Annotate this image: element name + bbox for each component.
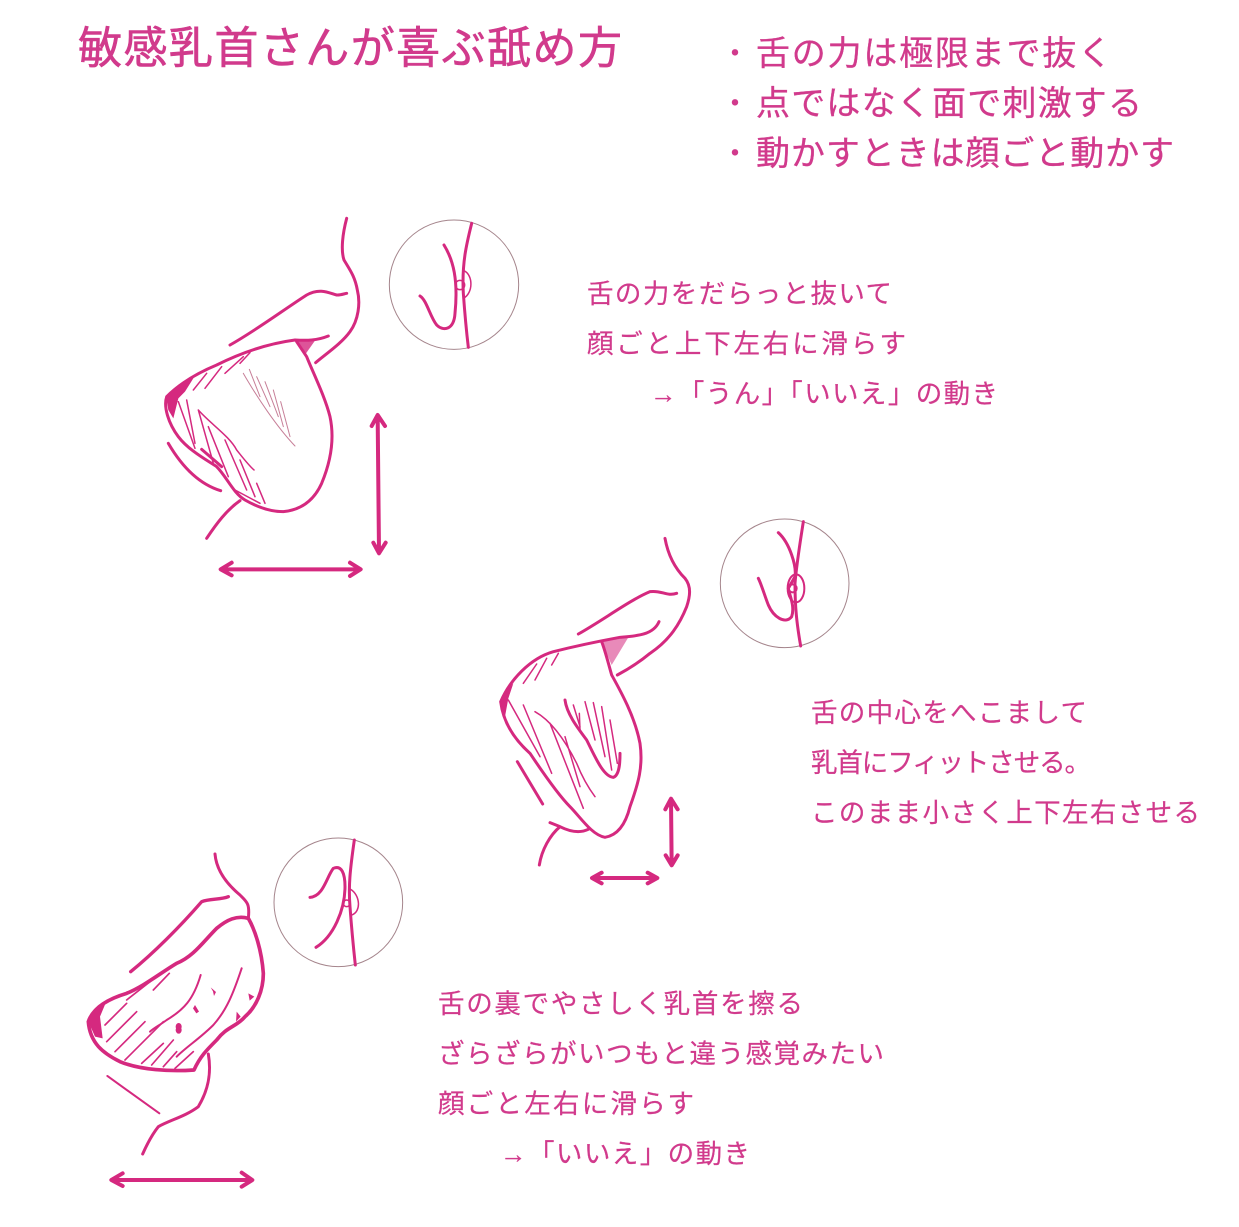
text block: technique 3: 舌の裏でやさしく乳首を擦る	[438, 989, 803, 1019]
bullet list: key points: ・	[720, 38, 750, 71]
tongue shading	[166, 341, 315, 503]
arrow: vertical	[372, 415, 386, 553]
lower lip	[168, 443, 221, 491]
text block: technique 2: 乳首にフィットさせる。	[811, 748, 1091, 778]
lower lip	[107, 1076, 159, 1113]
bullet list: key points: ・	[720, 138, 750, 171]
tongue shading and central groove	[501, 637, 628, 808]
arrow: vertical	[665, 799, 678, 865]
chin	[207, 501, 240, 538]
bullet list: key points: ・	[720, 88, 750, 121]
arrow: horizontal	[111, 1173, 252, 1187]
text block: technique 2: 舌の中心をへこまして	[811, 698, 1087, 728]
chin	[539, 823, 588, 865]
text block: technique 1: →「うん」「いいえ」の動き	[650, 379, 998, 409]
text block: technique 2: このまま小さく上下左右させる	[811, 798, 1200, 828]
text block: technique 3: →「いいえ」の動き	[500, 1139, 750, 1169]
bullet list: key points: 点ではなく面で刺激する	[756, 85, 1142, 123]
detail circle	[274, 838, 403, 967]
tongue outline	[88, 917, 263, 1071]
bullet list: key points: 動かすときは顔ごと動かす	[756, 135, 1174, 173]
face profile line	[617, 538, 690, 675]
bullet list: key points: 舌の力は極限まで抜く	[756, 35, 1112, 73]
detail circle	[389, 220, 519, 349]
chin and neck	[143, 1054, 210, 1154]
arrow: horizontal	[221, 563, 361, 576]
face profile line	[316, 218, 359, 363]
tongue shading and texture	[88, 968, 254, 1068]
arrow: horizontal	[592, 873, 657, 883]
face profile line	[215, 854, 249, 918]
text block: technique 3: 顔ごと左右に滑らす	[438, 1089, 694, 1119]
upper lip	[230, 291, 347, 345]
title: 敏感乳首さんが喜ぶ舐め方	[78, 24, 622, 73]
text block: technique 1: 舌の力をだらっと抜いて	[587, 279, 892, 309]
lower lip	[517, 762, 543, 804]
panel: technique 2 illustration	[501, 519, 849, 883]
bullet list: key points	[720, 35, 1174, 173]
text block: technique 3	[438, 989, 884, 1169]
panel: technique 3 illustration	[88, 838, 403, 1187]
text block: technique 1	[587, 279, 998, 409]
upper lip	[131, 897, 228, 972]
tongue outline	[166, 336, 332, 512]
text block: technique 1: 顔ごと上下左右に滑らす	[587, 329, 906, 359]
text block: technique 2	[811, 698, 1200, 828]
text block: technique 3: ざらざらがいつもと違う感覚みたい	[438, 1039, 884, 1069]
panel: technique 1 illustration	[166, 218, 519, 576]
detail circle	[720, 519, 849, 648]
tongue outline	[501, 622, 659, 837]
upper lip	[578, 591, 677, 634]
